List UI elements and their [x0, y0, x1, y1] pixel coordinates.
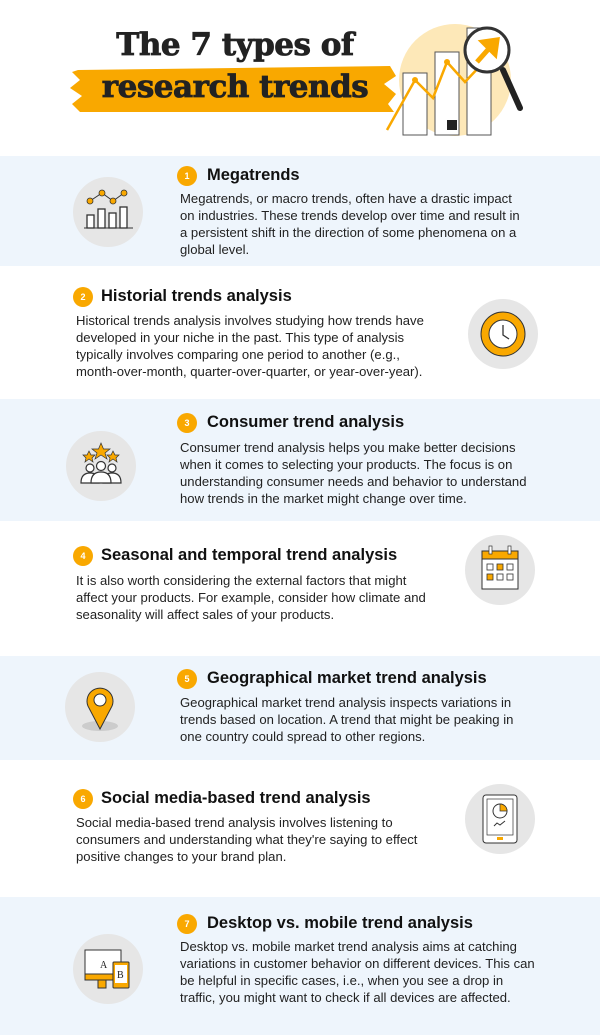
text: affect your products. For example, consider how climate and — [76, 590, 426, 605]
text: It is also worth considering the external factors that might — [76, 573, 406, 588]
badge 2 — [73, 287, 93, 307]
badge 1 — [177, 166, 197, 186]
text: Historical trends analysis involves studying how trends have — [76, 313, 424, 328]
badge 7: 7 — [184, 919, 190, 929]
title band brush — [70, 66, 396, 112]
title: research trends — [102, 69, 368, 105]
text: developed in your niche in the past. This type of analysis — [76, 330, 404, 345]
badge 4: 4 — [80, 551, 86, 561]
panel 6: social media — [73, 784, 535, 864]
text: understanding consumer needs and behavior to understand — [180, 474, 526, 489]
panel 2: historical — [73, 287, 538, 379]
icon: devices — [73, 934, 143, 1004]
icon: tablet — [465, 784, 535, 854]
text: Geographical market trend analysis inspects variations in — [180, 695, 511, 710]
text: typically involves comparing one period to another (e.g., — [76, 347, 400, 362]
text: consumers and understanding what they're saying to effect — [76, 832, 417, 847]
text — [76, 573, 426, 622]
text: a persistent shift in the direction of some phenomena on a — [180, 225, 516, 240]
heading: Desktop vs. mobile trend analysis — [207, 914, 473, 932]
badge 7 — [177, 914, 197, 934]
text — [76, 815, 418, 864]
badge 1: 1 — [184, 171, 190, 181]
heading: Consumer trend analysis — [207, 413, 404, 431]
text — [76, 313, 424, 379]
header — [70, 24, 523, 136]
title: The 7 types of — [116, 27, 354, 63]
heading: Social media-based trend analysis — [101, 789, 371, 807]
text: on industries. These trends develop over time and result in — [180, 208, 520, 223]
heading: Megatrends — [207, 166, 300, 184]
text — [180, 939, 535, 1005]
icon: bar chart — [73, 177, 143, 247]
text — [180, 440, 526, 506]
badge 3: 3 — [184, 418, 190, 428]
text: variations in customer behavior on different devices. This can — [180, 956, 535, 971]
badge 3 — [177, 413, 197, 433]
icon: clock — [468, 299, 538, 369]
text: seasonality will affect sales of your products. — [76, 607, 334, 622]
text — [180, 695, 513, 744]
text: global level. — [180, 242, 249, 257]
icon: devices: B — [117, 970, 124, 981]
heading: Historial trends analysis — [101, 287, 292, 305]
text: one country could spread to other regions. — [180, 729, 425, 744]
illustration: chart with magnifier — [386, 24, 523, 136]
badge 6 — [73, 789, 93, 809]
icon: devices: A — [100, 960, 108, 971]
text: Desktop vs. mobile market trend analysis aims at catching — [180, 939, 517, 954]
badge 5: 5 — [184, 674, 190, 684]
icon: calendar — [465, 535, 535, 605]
text: trends based on location. A trend that might be peaking in — [180, 712, 513, 727]
icon: map pin — [65, 672, 135, 742]
icon: people stars — [66, 431, 136, 501]
text: Megatrends, or macro trends, often have a drastic impact — [180, 191, 512, 206]
heading: Geographical market trend analysis — [207, 669, 487, 687]
panel 1: megatrends — [0, 156, 600, 266]
text: traffic, you might want to check if all devices are affected. — [180, 990, 511, 1005]
badge 4 — [73, 546, 93, 566]
panel 4: seasonal — [73, 535, 535, 622]
badge 6: 6 — [80, 794, 86, 804]
text: Consumer trend analysis helps you make better decisions — [180, 440, 516, 455]
text: month-over-month, quarter-over-quarter, or year-over-year). — [76, 364, 422, 379]
text: how trends in the market might change over time. — [180, 491, 467, 506]
text: be helpful in specific cases, i.e., when you see a drop in — [180, 973, 503, 988]
panel 7: desktop vs mobile — [0, 897, 600, 1035]
heading: Seasonal and temporal trend analysis — [101, 546, 397, 564]
text — [180, 191, 520, 257]
text: positive changes to your brand plan. — [76, 849, 286, 864]
panel 3: consumer — [0, 399, 600, 521]
badge 5 — [177, 669, 197, 689]
text: Social media-based trend analysis involves listening to — [76, 815, 393, 830]
title — [102, 27, 368, 105]
panel 5: geographical — [0, 656, 600, 760]
text: when it comes to selecting your products. The focus is on — [180, 457, 512, 472]
badge 2: 2 — [80, 292, 86, 302]
